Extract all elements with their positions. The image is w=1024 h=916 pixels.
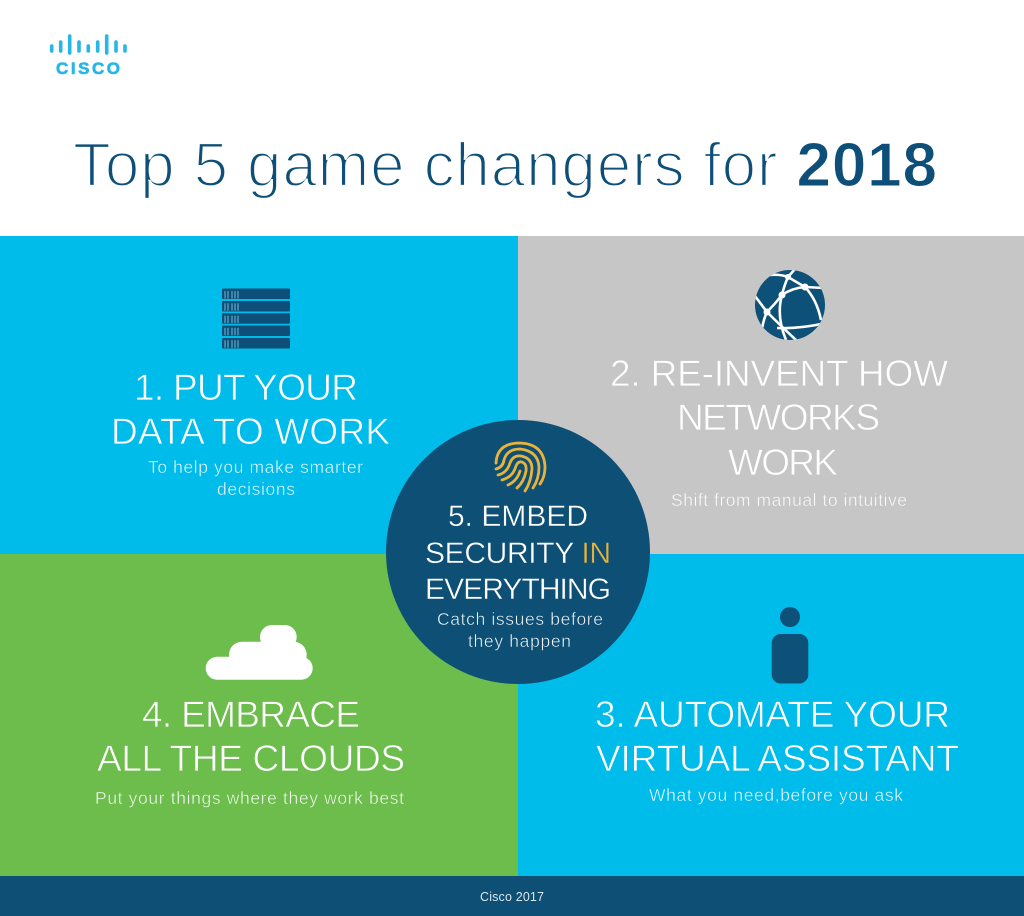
description: Catch issues before: [437, 609, 603, 629]
heading: [111, 367, 390, 452]
heading: SECURITY IN: [425, 537, 611, 570]
heading: NETWORKS: [677, 397, 880, 438]
icon: fingerprint: [496, 443, 545, 491]
heading: 2. RE-INVENT HOW: [610, 353, 948, 394]
icon: person: [772, 607, 808, 684]
icon: globe network: [755, 269, 826, 341]
heading: VIRTUAL ASSISTANT: [596, 738, 959, 779]
heading: DATA TO WORK: [111, 411, 390, 452]
heading: [425, 500, 611, 606]
heading: 1. PUT YOUR: [134, 367, 358, 408]
description: To help you make smarter: [148, 457, 363, 477]
icon: server stack: [222, 288, 290, 348]
description: decisions: [217, 479, 295, 499]
heading: [595, 694, 959, 779]
heading: [610, 353, 948, 483]
description: they happen: [468, 631, 571, 651]
heading: EVERYTHING: [425, 573, 611, 606]
panel: put your data to work: [0, 236, 518, 554]
heading: ALL THE CLOUDS: [97, 738, 405, 779]
heading: 5. EMBED: [448, 500, 588, 533]
cisco logo: [52, 36, 125, 78]
cisco logo: CISCO: [56, 59, 120, 78]
icon: cloud: [206, 625, 313, 680]
title: Top 5 game changers for 2018: [73, 131, 937, 200]
heading: 4. EMBRACE: [142, 694, 360, 735]
heading: 3. AUTOMATE YOUR: [595, 694, 950, 735]
panel: automate virtual assistant: [518, 554, 1024, 876]
heading: [97, 694, 405, 779]
panel: re-invent networks: [518, 236, 1024, 554]
footer: [0, 876, 1024, 916]
heading: WORK: [728, 442, 838, 483]
description: Put your things where they work best: [95, 788, 404, 808]
panel: embrace all the clouds: [0, 554, 518, 876]
description: Shift from manual to intuitive: [671, 490, 907, 510]
description: What you need,before you ask: [649, 785, 903, 805]
description: [437, 609, 603, 651]
footer: Cisco 2017: [480, 890, 544, 904]
panel: embed security circle: [386, 420, 650, 684]
description: [148, 457, 363, 499]
